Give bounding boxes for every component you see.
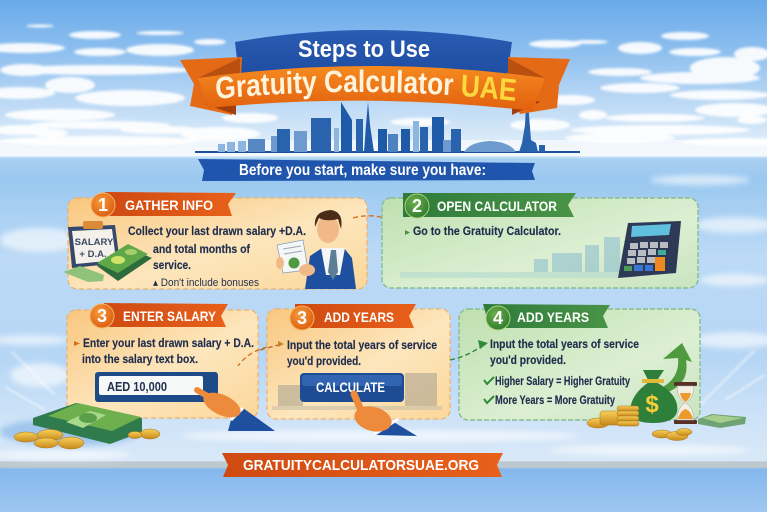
icon: hourglass	[674, 382, 697, 424]
icon: hand pressing calculate	[352, 394, 417, 436]
calculate button	[300, 373, 404, 402]
step 3b text	[287, 338, 437, 368]
subtitle banner	[198, 159, 535, 181]
step 4 ribbon	[483, 304, 610, 330]
title banner	[180, 30, 570, 115]
subtitle banner: Before you start, make sure you have:	[239, 162, 486, 179]
arrow: add years to step 4	[260, 341, 284, 350]
panel: step 1 gather info	[63, 192, 367, 289]
title line 2: Gratuity Calculator UAE	[216, 70, 516, 101]
step 3b ribbon: ADD YEARS	[324, 309, 394, 325]
step 3 text: Enter your last drawn salary + D.A.	[83, 336, 254, 350]
calculate button: CALCULATE	[316, 379, 385, 395]
step 2 ribbon	[403, 193, 576, 218]
step 4 text: you'd provided.	[490, 353, 566, 367]
step 3b text: you'd provided.	[287, 354, 361, 368]
step 3 ribbon: ENTER SALARY	[123, 308, 217, 324]
icon: money bag: $	[645, 391, 659, 418]
faded building backdrop	[272, 373, 442, 410]
checklist: Higher Salary = Higher Gratuity	[495, 376, 630, 388]
footer website banner: GRATUITYCALCULATORSUAE.ORG	[243, 457, 479, 474]
step 1 text: Collect your last drawn salary +D.A.	[128, 224, 306, 238]
step 1 text: ▴ Don't include bonuses	[153, 277, 259, 289]
orange ribbon tails	[180, 57, 570, 115]
icon: businessman with document	[276, 210, 356, 289]
icon: money bag	[630, 370, 677, 423]
arrow: into step 4	[450, 340, 488, 360]
footer website banner	[222, 453, 503, 477]
step 3 text	[74, 336, 254, 366]
step 1 text: and total months of	[153, 242, 251, 256]
icon: clipboard with bills	[63, 221, 152, 282]
icon: coins stacks	[587, 406, 692, 440]
checklist: More Years = More Gratuity	[495, 395, 615, 407]
step 4 text: Input the total years of service	[490, 337, 639, 351]
blue upper ribbon	[235, 30, 512, 85]
icon: growth arrow	[661, 343, 692, 393]
icon: hand pointing at salary box	[197, 387, 275, 431]
arrow: step 1 to step 2	[353, 216, 398, 226]
step 2 ribbon: OPEN CALCULATOR	[437, 198, 557, 214]
panel: step 3 add years	[267, 304, 450, 419]
checklist	[484, 376, 630, 407]
icon: calculator	[618, 221, 681, 278]
step 4 ribbon: 4	[493, 308, 503, 328]
step 3 ribbon: 3	[97, 306, 107, 326]
salary input box	[95, 372, 218, 402]
step 3 ribbon	[90, 303, 228, 328]
step 2 text: Go to the Gratuity Calculator.	[413, 224, 561, 238]
faded city backdrop	[400, 237, 620, 278]
step 2 ribbon: 2	[412, 196, 422, 216]
icon: cash stack and coins	[14, 403, 160, 449]
step 4 text	[490, 337, 639, 367]
title line 1: Steps to Use	[298, 36, 430, 63]
arrow: step 3 to add years	[238, 347, 267, 366]
step 1 ribbon	[91, 192, 236, 217]
step 3b text: Input the total years of service	[287, 338, 437, 352]
step 3 text: into the salary text box.	[82, 352, 198, 366]
icon: clipboard with bills: + D.A.	[79, 249, 107, 260]
step 3b ribbon: 3	[297, 308, 307, 328]
orange main ribbon	[198, 66, 545, 111]
salary input box: AED 10,000	[107, 379, 167, 394]
panel: step 2 open calculator	[382, 193, 698, 288]
icon: banknotes right	[698, 414, 746, 428]
step 3b ribbon	[290, 304, 416, 330]
step 1 ribbon: 1	[98, 195, 108, 215]
step 1 text	[128, 224, 306, 289]
panel: step 3 enter salary	[67, 303, 258, 418]
step 4 ribbon: ADD YEARS	[517, 309, 589, 325]
step 1 ribbon: GATHER INFO	[125, 197, 213, 213]
skyline	[195, 85, 580, 153]
icon: clipboard with bills: SALARY	[75, 237, 114, 248]
panel: step 4 add years	[459, 304, 700, 420]
step 1 text: service.	[153, 258, 191, 272]
